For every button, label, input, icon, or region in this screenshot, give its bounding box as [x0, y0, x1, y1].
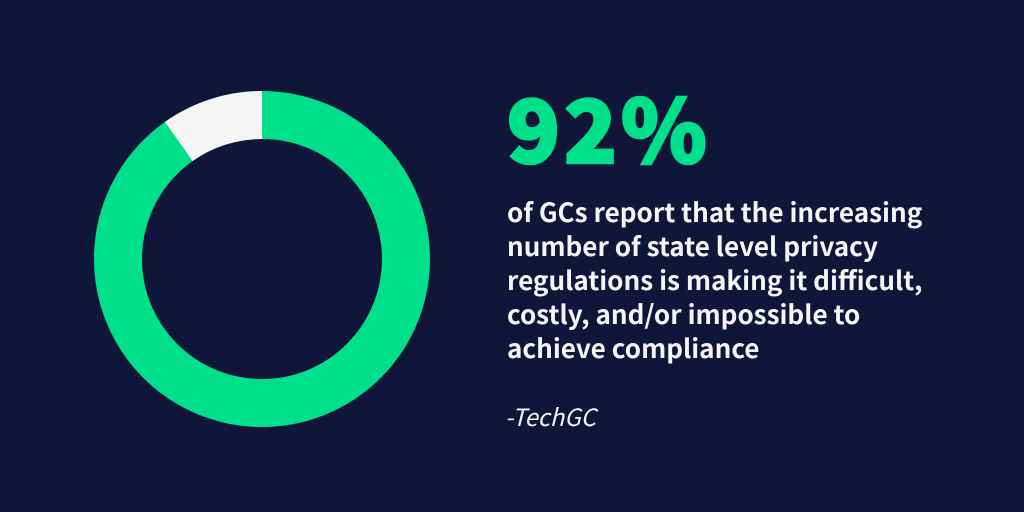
donut segment: 92% green — [118, 115, 406, 403]
headline statistic: 92% — [507, 63, 711, 189]
description text: achieve compliance — [507, 328, 759, 366]
description text: number of state level privacy — [507, 226, 878, 264]
description text: regulations is making it difficult, — [507, 260, 922, 298]
donut segment: remaining white — [165, 91, 262, 161]
description text: of GCs report that the increasing — [507, 192, 922, 230]
source attribution: -TechGC — [505, 398, 596, 433]
description text — [507, 192, 922, 366]
description text: costly, and/or impossible to — [507, 294, 860, 332]
